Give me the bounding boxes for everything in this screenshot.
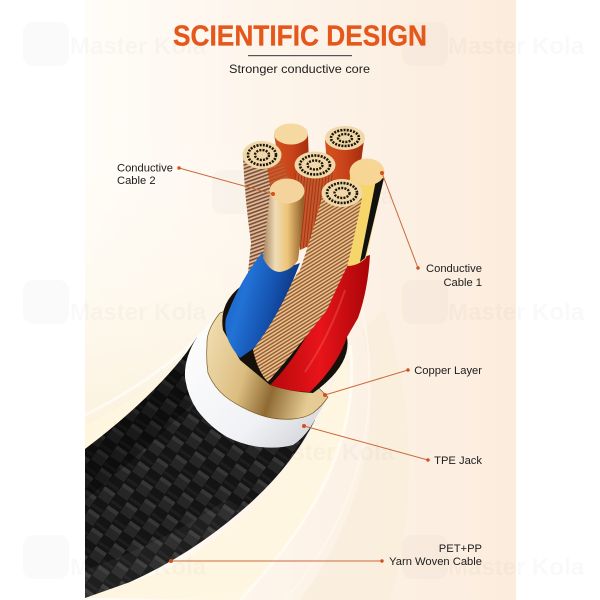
label: TPE jack: TPE Jack	[434, 455, 482, 467]
title: SCIENTIFIC DESIGN	[173, 20, 427, 52]
title divider	[248, 55, 352, 56]
wire: back top (orange)	[274, 124, 310, 200]
wire: red conductor	[270, 255, 370, 392]
label: yarn woven cable: PET+PP	[439, 543, 482, 555]
braided cable jacket	[85, 337, 315, 598]
label: conductive cable 2: Cable 2	[117, 175, 156, 187]
leader: conductive cable 2	[177, 166, 275, 196]
label: conductive cable 1: Cable 1	[443, 277, 482, 289]
leader: TPE jack	[302, 424, 430, 462]
leader: copper layer	[323, 368, 410, 397]
copper layer ring	[207, 305, 328, 419]
wire: twisted copper conductor	[253, 179, 362, 382]
label: copper layer: Copper Layer	[414, 365, 482, 377]
label: conductive cable 2: Conductive	[117, 162, 173, 174]
cable opening	[222, 282, 348, 393]
leader: yarn woven cable	[169, 559, 384, 563]
subtitle: Stronger conductive core	[229, 62, 370, 76]
wire: center (orange)	[294, 152, 336, 250]
wire: back right (orange)	[325, 126, 365, 200]
wire: gold striped conductor	[347, 158, 384, 266]
leader: conductive cable 1	[380, 171, 420, 270]
background panel	[85, 0, 516, 600]
wire: blue conductor	[225, 178, 304, 358]
wire: back left (twisted copper)	[242, 141, 292, 282]
TPE white ring	[185, 313, 328, 448]
label: conductive cable 1: Conductive	[426, 263, 482, 275]
label: yarn woven cable: Yarn Woven Cable	[389, 556, 482, 568]
